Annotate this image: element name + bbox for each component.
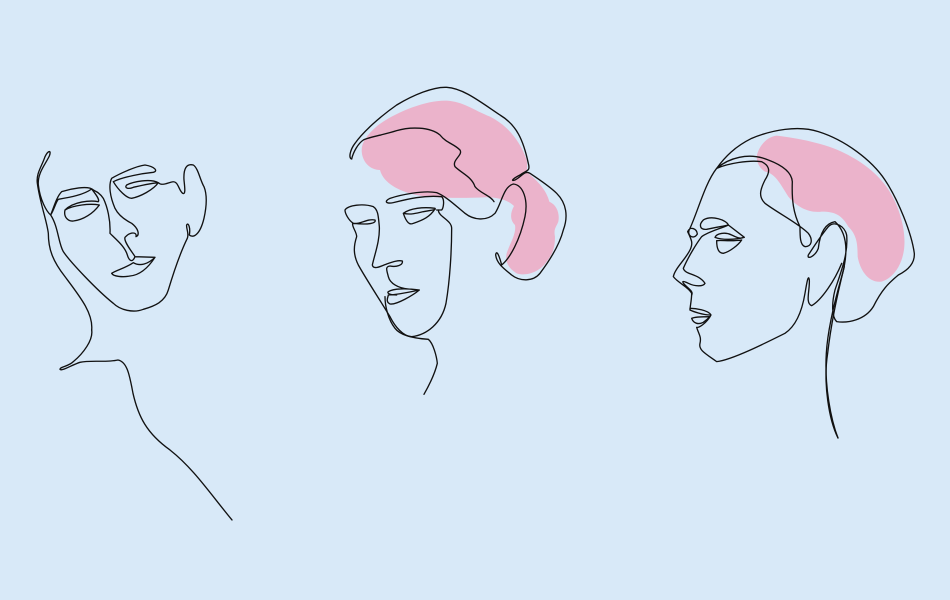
line drawing: right head [673, 129, 914, 438]
portrait: centre face with hair bun [345, 87, 566, 394]
pink hair shape: right [757, 136, 905, 282]
pink hair shape: centre [362, 101, 559, 274]
line drawing: centre face [345, 205, 452, 394]
line drawing: centre hair [350, 87, 566, 280]
portrait: right profile face [673, 129, 914, 438]
portrait: left face [37, 152, 232, 520]
